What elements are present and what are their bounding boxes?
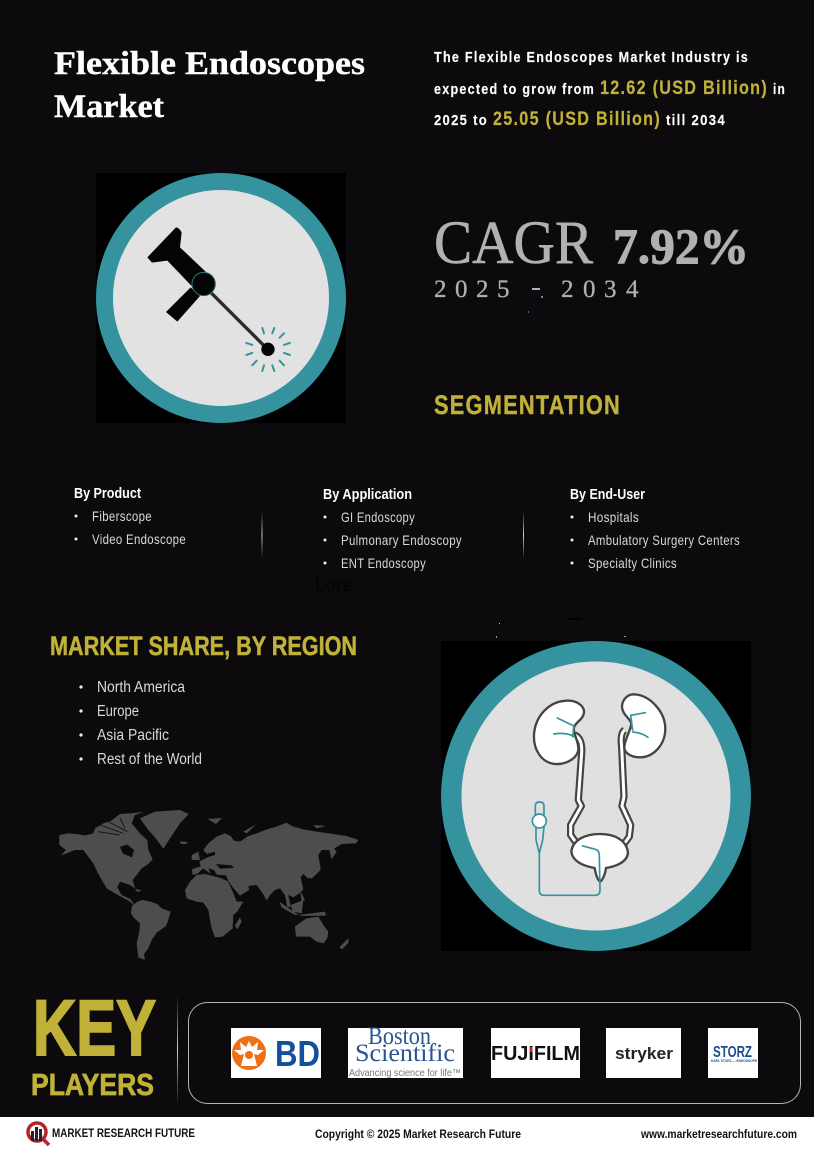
panel: key player logos [188, 1002, 800, 1104]
CAGR figure: 7.92% [613, 218, 749, 274]
title: Flexible Endoscopes [54, 46, 365, 82]
faint ghost text: Lore [315, 575, 352, 595]
segment: by product: By Product [74, 485, 141, 502]
segment: by end-user: Ambulatory Surgery Centers [588, 532, 740, 548]
logo: Boston Scientific: Boston [368, 1023, 431, 1050]
market growth summary text: expected to grow from [434, 81, 595, 98]
title: Market [54, 89, 164, 125]
segment: by end-user: Specialty Clinics [588, 555, 677, 571]
logo: BD [231, 1028, 321, 1078]
CAGR figure [434, 210, 749, 313]
logo: Fujifilm: FUJIFILM [491, 1043, 580, 1065]
icon: endoscope in teal circle [96, 173, 346, 423]
logo: Storz: STORZ [713, 1044, 752, 1061]
footer [0, 1117, 814, 1150]
segment: by product [74, 485, 186, 547]
logo: Stryker: stryker [615, 1044, 673, 1063]
market growth summary text [434, 49, 786, 130]
segment: by application: Pulmonary Endoscopy [341, 532, 462, 548]
heading: segmentation: SEGMENTATION [434, 390, 621, 420]
icon: market research future logo [28, 1123, 49, 1145]
title [54, 46, 365, 125]
CAGR figure: 2034 [561, 276, 639, 303]
segment: by application [323, 486, 462, 571]
footer: MARKET RESEARCH FUTURE [52, 1126, 195, 1140]
market growth summary text: The Flexible Endoscopes Market Industry is [434, 49, 749, 66]
segment: by application: By Application [323, 486, 412, 503]
heading: key players: PLAYERS [31, 1067, 154, 1102]
region list [79, 679, 202, 768]
region list: Rest of the World [97, 751, 202, 768]
icon: urinary tract with catheter in teal circle [441, 641, 751, 951]
segment: by end-user [570, 486, 740, 571]
logo: Boston Scientific: Scientific [355, 1040, 455, 1067]
region list: North America [97, 679, 185, 696]
world map [59, 810, 358, 960]
heading: key players [31, 983, 156, 1102]
logo: Stryker [606, 1028, 681, 1078]
region list: Europe [97, 703, 139, 720]
region list: Asia Pacific [97, 727, 169, 744]
market growth summary text: 2025 to [434, 112, 488, 129]
CAGR figure: CAGR [434, 210, 593, 277]
market growth summary text: till 2034 [666, 112, 726, 129]
segment: by end-user: Hospitals [588, 509, 639, 525]
segment: by application: GI Endoscopy [341, 509, 415, 525]
logo: Storz [708, 1028, 758, 1078]
logo: BD: BD [275, 1033, 320, 1074]
logo: Boston Scientific: Advancing science for life™ [349, 1068, 461, 1079]
footer: Copyright © 2025 Market Research Future [315, 1127, 521, 1141]
segment: by application: ENT Endoscopy [341, 555, 426, 571]
segment: by product: Fiberscope [92, 508, 152, 524]
segment: by product: Video Endoscope [92, 531, 186, 547]
heading: market share by region: MARKET SHARE, BY REGION [50, 631, 357, 661]
logo: Fujifilm [491, 1028, 580, 1078]
heading: key players: KEY [33, 983, 156, 1072]
market growth summary text: 12.62 (USD Billion) [600, 78, 768, 99]
market growth summary text: in [773, 81, 786, 98]
market growth summary text: 25.05 (USD Billion) [493, 109, 661, 130]
logo: Boston Scientific [348, 1023, 463, 1079]
segment: by end-user: By End-User [570, 486, 645, 503]
CAGR figure: 2025 [434, 276, 510, 303]
logo: Storz: KARL STORZ — ENDOSKOPE [711, 1058, 757, 1063]
